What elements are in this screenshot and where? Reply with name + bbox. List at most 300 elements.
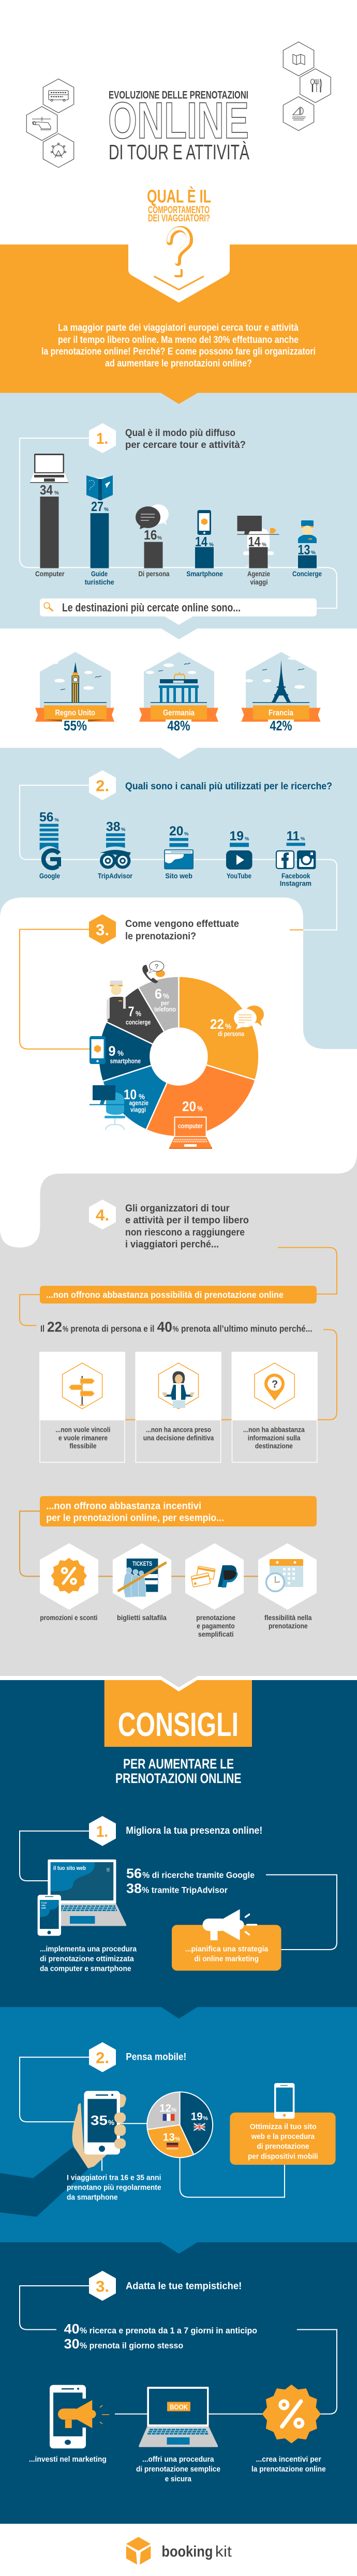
channel: Google: 56: [39, 810, 53, 825]
blue chevron: [160, 2242, 198, 2254]
icon: TripAdvisor owl: [100, 850, 131, 869]
item: incentives: ...crea incentivi per: [256, 2455, 321, 2464]
caption: [243, 1426, 305, 1450]
channel: Sito web: [165, 824, 193, 880]
heading: qual e il: DEI VIAGGIATORI?: [148, 213, 210, 224]
heading question 2: Quali sono i canali più utilizzati per le ricerche?: [125, 781, 332, 792]
bar chart: [30, 454, 322, 586]
incentive: flessibilita: prenotazione: [269, 1622, 308, 1630]
icon: browser: [165, 850, 193, 869]
orange mobile optimisation box: Ottimizza il tuo sito: [250, 2123, 317, 2131]
stat 56 and 38 percent: % tramite TripAdvisor: [142, 1885, 228, 1895]
caption: destinazione: [255, 1442, 293, 1450]
label 6 percent: [154, 986, 176, 1013]
stat sentence 22 and 40 percent: Il: [40, 1324, 44, 1334]
icon: tickets no queue: TICKETS: [132, 1561, 152, 1567]
channel: Facebook Instagram: Instagram: [280, 879, 311, 888]
orange marketing box: di online marketing: [194, 1955, 259, 1964]
incentive: flessibilita: flessibilità nella: [264, 1613, 312, 1622]
incentive: promozioni: promozioni e sconti: [40, 1613, 97, 1622]
white chevron: [160, 747, 198, 759]
subheading: [115, 1756, 241, 1786]
chevron: [154, 276, 204, 290]
heading question 1: per cercare tour e attività?: [125, 439, 246, 451]
implementa text: ...implementa una procedura: [40, 1945, 137, 1954]
icon: laptop with website: il tuo sito web: [53, 1865, 86, 1871]
number badge 4: 4.: [96, 1206, 109, 1224]
label 6 percent: %: [163, 992, 169, 1000]
icon: smartphone: [90, 1036, 106, 1064]
stat 56 and 38 percent: 56: [126, 1866, 142, 1881]
caption: e vuole rimanere: [58, 1433, 108, 1442]
icon: bus: [43, 79, 74, 113]
incentive: biglietti: biglietti saltafila: [117, 1613, 167, 1622]
icon: smartphone: [198, 510, 211, 535]
pie chart: [147, 2092, 213, 2158]
caption: [143, 1426, 214, 1442]
icon: Google G: [43, 850, 59, 868]
channel: Sito web: Sito web: [165, 872, 192, 880]
channel: Google: Google: [39, 872, 60, 880]
icon: question mark: [169, 229, 190, 277]
icon: magnifier: [44, 603, 53, 611]
heading: qual e il: QUAL È IL: [147, 186, 211, 207]
icon: laptop with computer label: computer: [178, 1122, 203, 1130]
bar agenzie: viaggi: [250, 578, 268, 586]
intro paragraph: [41, 323, 316, 369]
label 7 percent: 7: [128, 1004, 135, 1019]
channel: YouTube: [226, 829, 252, 880]
label 7 percent: %: [136, 1009, 141, 1018]
phone with 35 percent: %: [108, 2118, 115, 2126]
number badge tip 1: 1.: [96, 1822, 108, 1840]
subheading: PRENOTAZIONI ONLINE: [115, 1771, 241, 1786]
panel: section 3 white: [0, 897, 357, 1248]
bar di persona: [139, 527, 170, 578]
orange marketing box: [172, 1909, 281, 1971]
orange mobile optimisation box: [230, 2083, 336, 2165]
icon: location question pin in hexagon: [255, 1363, 294, 1409]
label 6 percent: per: [161, 999, 169, 1007]
caption 16 to 35: prenotano più regolarmente: [67, 2183, 161, 2192]
icon: percent badge: [263, 2385, 320, 2443]
heading question 4: [125, 1203, 249, 1250]
item: booking procedure: [136, 2387, 220, 2483]
blue chevron: [160, 628, 198, 639]
icon: phone with megaphone: [50, 2385, 109, 2448]
incentive: biglietti: [113, 1543, 171, 1622]
card: Germania: Germania: [163, 709, 195, 717]
icon: agency desk and chair: [90, 1085, 125, 1130]
channel: Sito web: 20: [169, 824, 183, 838]
orange bar 2: ...non offrono abbastanza incentivi: [46, 1501, 201, 1512]
label 13 percent Germany: 13: [163, 2131, 175, 2143]
number badge tip 2: 2.: [96, 2048, 109, 2067]
channel: TripAdvisor: [98, 820, 132, 880]
channel: Sito web: %: [184, 831, 189, 837]
label 12 percent France: [159, 2103, 176, 2121]
label 22 percent: %: [225, 1022, 231, 1031]
connector lines: [20, 1831, 337, 1950]
label 22 percent: di persona: [218, 1030, 245, 1038]
label 10 percent: viaggi: [130, 1106, 146, 1114]
number badge 2: 2.: [96, 777, 109, 795]
icon: Instagram: [297, 850, 316, 869]
label 20 percent: 20: [182, 1099, 196, 1114]
card: Germania: 48%: [168, 718, 190, 733]
caption: una decisione definitiva: [143, 1433, 214, 1442]
label 9 percent: [109, 1043, 141, 1065]
orange mobile optimisation box: di prenotazione: [257, 2143, 309, 2151]
caption 16 to 35: da smartphone: [67, 2193, 118, 2201]
number badge 1: [89, 423, 116, 453]
icon: laptop with computer label: [169, 1117, 212, 1149]
number badge 3: 3.: [96, 921, 109, 939]
icon: laptop with book button: BOOK: [170, 2403, 188, 2411]
icon cluster left hexagons: [26, 79, 74, 168]
panel: consigli navy: [0, 1676, 357, 2007]
bar concierge: 13: [298, 542, 310, 557]
number badge tip 3: [89, 2271, 116, 2301]
phone with 35 percent: 35: [91, 2113, 108, 2128]
implementa text: di prenotazione ottimizzata: [40, 1955, 135, 1964]
stat sentence 22 and 40 percent: 40: [157, 1319, 172, 1335]
icon: tickets no queue: [119, 1559, 166, 1597]
icon: undecided woman in hexagon: [158, 1363, 199, 1409]
donut chart: [98, 977, 259, 1136]
icon: concierge: [298, 520, 317, 543]
stat 40 and 30 percent: % ricerca e prenota da 1 a 7 giorni in anticipo: [80, 2326, 257, 2335]
channel: Facebook Instagram: Facebook: [281, 872, 310, 880]
stat 56 and 38 percent: % di ricerche tramite Google: [142, 1871, 255, 1880]
incentive: pagamento: e pagamento: [197, 1622, 235, 1630]
donut labels: [90, 961, 264, 1149]
label 10 percent: agenzie: [129, 1100, 148, 1107]
icon: travel agency desk: [237, 516, 279, 568]
icon: calendar and clock: [266, 1559, 303, 1591]
label 10 percent: [124, 1087, 148, 1114]
intro paragraph: ad aumentare le prenotazioni online?: [105, 358, 252, 369]
intro paragraph: La maggior parte dei viaggiatori europei cerca tour e attività: [58, 323, 299, 333]
orange mobile optimisation box: web e la procedura: [251, 2133, 315, 2141]
card: Germania: [139, 652, 218, 733]
icon: laptop with book button: [139, 2387, 218, 2447]
bar concierge: Concierge: [292, 570, 322, 578]
card: Francia: Francia: [269, 709, 293, 717]
channel: Facebook Instagram: [276, 829, 316, 888]
stat 40 and 30 percent: 40: [64, 2321, 80, 2337]
icon: telephone with bubble: [142, 961, 165, 983]
connector line: [20, 438, 337, 608]
incentive: flessibilita: [258, 1543, 317, 1630]
icon cluster right hexagons: [283, 42, 331, 130]
card: Francia: [241, 652, 321, 733]
tip 2 heading: Pensa mobile!: [126, 2051, 186, 2063]
label 10 percent: 10: [124, 1087, 137, 1102]
number badge 2: [89, 770, 116, 800]
icon: cutlery: [300, 69, 331, 102]
icon: Brandenburg Gate: [158, 673, 199, 702]
icon: ferris wheel: [43, 133, 74, 168]
heading question 4: e attività per il tempo libero: [125, 1215, 249, 1226]
channel: Facebook Instagram: 11: [287, 829, 300, 843]
bar concierge: %: [311, 550, 316, 556]
label 22 percent: [210, 1016, 245, 1038]
orange connector: [20, 930, 91, 1049]
heading question 3: Come vengono effettuate: [125, 918, 239, 930]
icon: speech bubbles: [234, 1006, 264, 1029]
icon: boat: [283, 97, 314, 130]
bar di persona: Di persona: [139, 570, 170, 578]
orange chevron: [160, 393, 198, 404]
reason card 1: [39, 1352, 125, 1462]
label 22 percent: 22: [210, 1016, 224, 1032]
caption: [55, 1426, 110, 1450]
label 9 percent: %: [117, 1049, 124, 1058]
channel: TripAdvisor: TripAdvisor: [98, 872, 132, 880]
incentive connector: [20, 1511, 317, 1576]
panel: section 2 channels: [0, 747, 357, 1069]
stat sentence 22 and 40 percent: %: [63, 1325, 68, 1334]
icon: Big Ben: [71, 662, 79, 702]
bar computer: %: [54, 490, 59, 496]
panel: tip 2 blue: [0, 2006, 357, 2242]
panel: destinations: [35, 628, 321, 733]
icon: phone with website: web: [41, 1907, 46, 1909]
icon: telephone with bubble: ?: [155, 963, 158, 970]
bar computer: 34: [40, 482, 53, 498]
implementa text: [40, 1945, 137, 1973]
bar computer: Computer: [35, 570, 65, 578]
bar guide: %: [104, 507, 109, 513]
heading: qual e il: [147, 186, 211, 224]
icon: helicopter: [26, 107, 57, 141]
stat 40 and 30 percent: [64, 2321, 257, 2352]
navy chevron: [160, 2006, 198, 2018]
number badge 4: [89, 1200, 116, 1230]
bar agenzie: Agenzie: [247, 570, 270, 578]
connector line: [20, 785, 337, 930]
channel: Google: %: [55, 817, 59, 823]
icon: chat bubbles: [136, 504, 169, 529]
label 10 percent: %: [139, 1092, 145, 1101]
caption: ...non ha abbastanza: [243, 1426, 305, 1434]
panel: grey section background: [0, 1066, 357, 1676]
footer logo bookingkit: [126, 2537, 232, 2565]
channel: YouTube: YouTube: [227, 872, 251, 880]
label 13 percent Germany: %: [175, 2136, 180, 2142]
bar smartphone: 14: [195, 534, 207, 549]
bar di persona: %: [157, 535, 162, 541]
number badge 3: [89, 915, 116, 945]
channel: Facebook Instagram: %: [301, 836, 305, 842]
label 12 percent France: 12: [159, 2103, 171, 2115]
label 9 percent: smartphone: [110, 1057, 141, 1065]
orange bar 1: [40, 1286, 317, 1304]
bar agenzie: %: [262, 542, 266, 548]
item: incentives: [251, 2385, 326, 2474]
label 20 percent: %: [197, 1104, 203, 1113]
card: Francia: 42%: [270, 718, 292, 733]
icon: phone with website: [38, 1895, 61, 1936]
search bar callout: Le destinazioni più cercate online sono...: [62, 601, 241, 614]
channel: TripAdvisor: 38: [106, 820, 121, 834]
orange bar 1: ...non offrono abbastanza possibilità di prenotazione online: [46, 1290, 284, 1300]
bar agenzie: 14: [248, 534, 261, 549]
header title block: [108, 89, 249, 164]
consigli orange header: [105, 1676, 252, 1747]
title subtitle: DI TOUR E ATTIVITÀ: [109, 140, 249, 164]
stat 40 and 30 percent: 30: [64, 2336, 80, 2352]
label 7 percent: concierge: [126, 1019, 151, 1026]
number badge tip 2: [89, 2042, 116, 2072]
icon: laptop: [30, 454, 68, 483]
channel: YouTube: %: [245, 836, 249, 842]
heading question 4: Gli organizzatori di tour: [125, 1203, 230, 1214]
tip 1 heading: Migliora la tua presenza online!: [126, 1825, 262, 1836]
icon: phone with website: il tuo: [41, 1901, 47, 1904]
orange mobile optimisation box: per dispositivi mobili: [248, 2152, 318, 2161]
label 19 percent UK: 19: [191, 2110, 203, 2122]
tip 3 heading: Adatta le tue tempistiche!: [126, 2280, 242, 2292]
orange bar 2: per le prenotazioni online, per esempio...: [46, 1512, 224, 1524]
number badge tip 3: 3.: [96, 2277, 109, 2296]
label 19 percent UK: %: [203, 2115, 208, 2121]
orange marketing box: ...pianifica una strategia: [185, 1945, 269, 1954]
white hexagon shape: [128, 244, 230, 303]
consigli orange header: CONSIGLI: [118, 1705, 239, 1743]
icon: Eiffel Tower: [271, 660, 291, 702]
number badge 1: 1.: [96, 429, 108, 447]
phone with 35 percent: [84, 2091, 120, 2154]
orange bar 2: [40, 1496, 317, 1526]
icon: megaphone: [203, 1909, 257, 1940]
subheading: PER AUMENTARE LE: [123, 1756, 234, 1772]
stat sentence 22 and 40 percent: [40, 1319, 313, 1335]
incentive: pagamento: [185, 1543, 244, 1638]
bar agenzie: [247, 534, 270, 586]
panel: intro orange band: [0, 186, 357, 393]
connector lines: [20, 2057, 285, 2197]
panel: section 4: [20, 1200, 337, 1638]
label 13 percent Germany: [163, 2131, 180, 2150]
icon: phone: [274, 2083, 294, 2119]
footer logo bookingkit: booking: [161, 2543, 213, 2560]
stat 56 and 38 percent: [126, 1866, 255, 1896]
icon: YouTube: [226, 850, 252, 870]
icon: signpost in hexagon: [63, 1363, 102, 1409]
bar guide: 27: [91, 499, 103, 514]
label 7 percent: [126, 1004, 151, 1026]
heading question 4: i viaggiatori perché...: [125, 1239, 219, 1250]
illustration: arm: [0, 2147, 90, 2217]
heading question 1: Qual è il modo più diffuso: [125, 427, 235, 439]
number badge tip 1: [89, 1816, 116, 1846]
bar guide: turistiche: [85, 578, 114, 586]
search bar callout: [40, 598, 317, 625]
connector lines: [20, 2286, 337, 2414]
bar smartphone: Smartphone: [186, 570, 223, 578]
bar smartphone: [186, 534, 223, 578]
ribbon: [35, 708, 114, 722]
label 6 percent: telefono: [154, 1006, 176, 1013]
stat sentence 22 and 40 percent: %: [173, 1325, 178, 1334]
intro paragraph: per il tempo libero online. Ma meno del 30% effettuano anche: [58, 335, 299, 346]
bar smartphone: %: [209, 542, 214, 548]
panel: tip 3 navy: [0, 2242, 357, 2524]
footer logo bookingkit: kit: [215, 2543, 232, 2560]
caption: flessibile: [69, 1442, 97, 1450]
item: booking procedure: ...offri una procedura: [142, 2455, 214, 2464]
stat sentence 22 and 40 percent: prenota di persona e il: [70, 1324, 154, 1334]
heading question 4: non riescono a raggiungere: [125, 1226, 245, 1238]
card: Regno Unito: 55%: [64, 718, 87, 733]
channel: Google: [39, 810, 61, 880]
caption 16 to 35: [67, 2174, 161, 2201]
item: incentives: la prenotazione online: [251, 2465, 326, 2474]
incentive: pagamento: prenotazione: [196, 1613, 235, 1622]
item: booking procedure: di prenotazione semplice: [136, 2465, 220, 2474]
title kicker: EVOLUZIONE DELLE PRENOTAZIONI: [109, 89, 248, 101]
caption: ...non vuole vincoli: [55, 1426, 110, 1434]
bar di persona: 16: [144, 527, 157, 543]
label 9 percent: 9: [109, 1043, 116, 1059]
icon: location question pin in hexagon: ?: [272, 1379, 278, 1390]
label 19 percent UK: [191, 2110, 208, 2131]
icon: laptop with website: [38, 1860, 126, 1936]
bar guide: Guide: [91, 570, 108, 578]
stat 56 and 38 percent: 38: [126, 1880, 142, 1896]
reason card 3: [232, 1352, 318, 1462]
label 6 percent: 6: [155, 986, 162, 1001]
stat sentence 22 and 40 percent: 22: [47, 1319, 62, 1335]
illustration: hand holding phone: [72, 2091, 127, 2168]
item: invest in marketing: [29, 2385, 109, 2464]
panel: section 1 light blue: [0, 393, 357, 628]
item: invest in marketing: ...investi nel marketing: [29, 2455, 107, 2464]
orange connector lines: [20, 1248, 337, 1420]
icon: credit cards and PayPal: [191, 1565, 237, 1587]
label 12 percent France: %: [171, 2107, 176, 2114]
implementa text: da computer e smartphone: [40, 1965, 131, 1973]
caption 16 to 35: I viaggiatori tra 16 e 35 anni: [67, 2174, 161, 2182]
incentive: pagamento: semplificati: [198, 1630, 234, 1638]
incentive: promozioni: [40, 1543, 98, 1622]
channel: YouTube: 19: [230, 829, 244, 843]
icon: percent badge: [52, 1559, 86, 1593]
card: Regno Unito: [35, 652, 114, 733]
caption: ...non ha ancora preso: [146, 1426, 211, 1434]
icon: Facebook: [276, 851, 294, 869]
card: Regno Unito: Regno Unito: [55, 709, 95, 717]
bar computer: [35, 482, 65, 578]
bar concierge: [292, 542, 322, 578]
heading: qual e il: COMPORTAMENTO: [148, 205, 210, 216]
stat 40 and 30 percent: % prenota il giorno stesso: [80, 2341, 183, 2350]
icon: phone with website: sito: [41, 1904, 46, 1907]
channel: TripAdvisor: %: [121, 827, 126, 833]
icon: concierge figure: [107, 981, 126, 1020]
stat sentence 22 and 40 percent: prenota all’ultimo minuto perché...: [181, 1324, 313, 1334]
heading question 3: [125, 918, 239, 942]
bar guide: [85, 499, 114, 586]
icon: guide book: [86, 475, 113, 500]
icon: box logo: [126, 2537, 151, 2565]
item: booking procedure: e sicura: [165, 2475, 192, 2483]
title ONLINE outlined: ONLINE: [108, 92, 249, 149]
icon: map: [283, 42, 314, 76]
heading question 1: [125, 427, 246, 451]
